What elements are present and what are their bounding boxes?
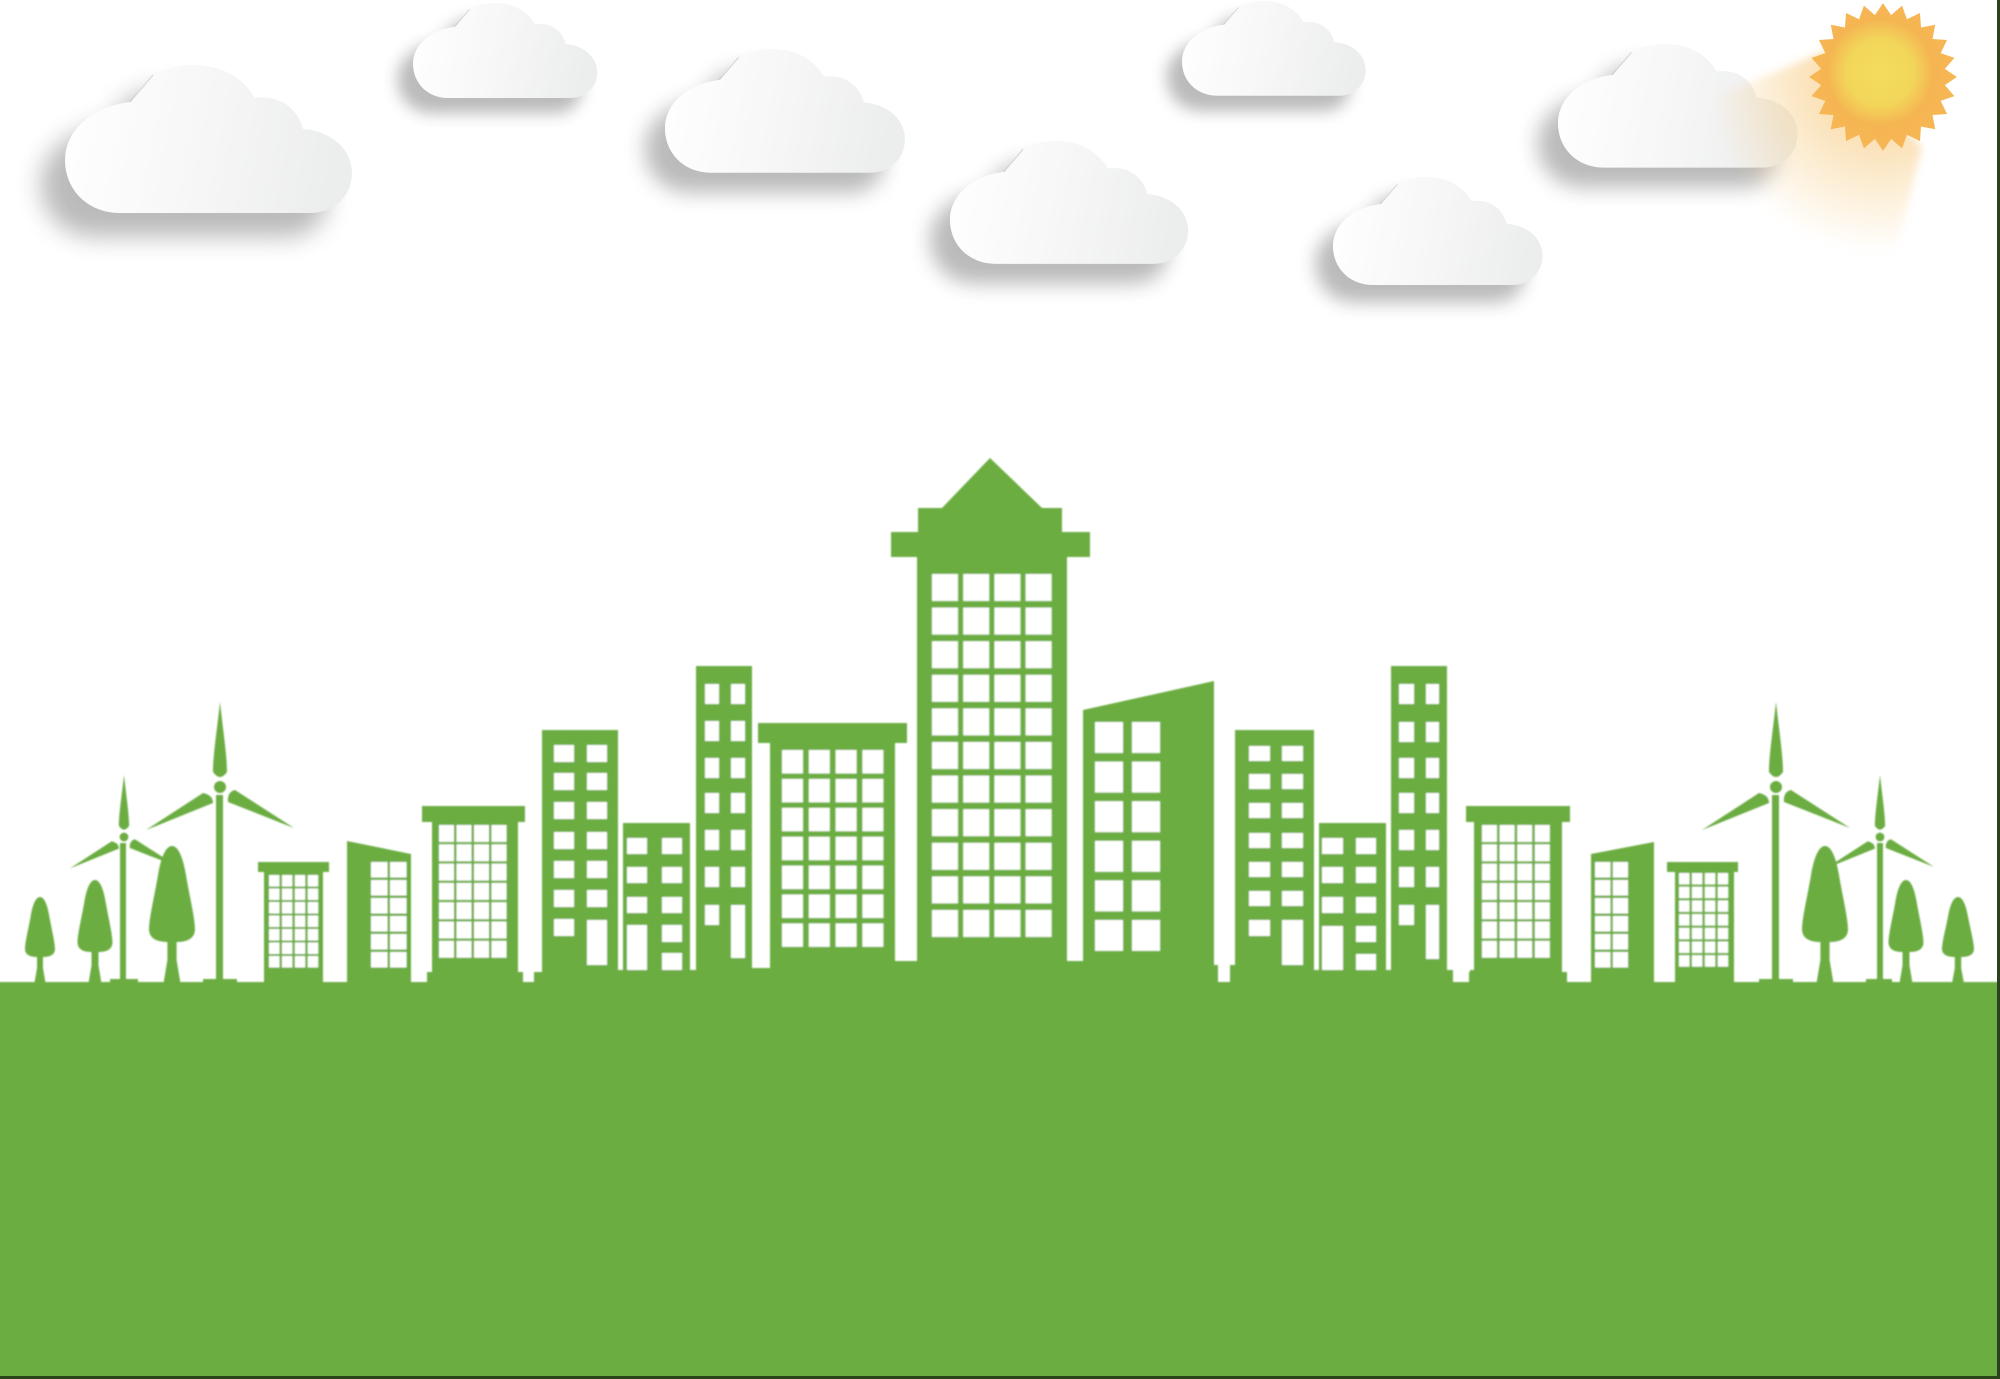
sun glow beam bbox=[1650, 50, 1922, 290]
tree 4 bbox=[1802, 846, 1848, 982]
building J bbox=[1319, 823, 1386, 982]
building bases bbox=[110, 961, 1892, 984]
image border right bbox=[1997, 0, 2000, 1379]
wind turbine large left bbox=[146, 702, 294, 983]
green city skyline bbox=[0, 458, 2000, 1379]
cloud 6 bbox=[1315, 177, 1543, 303]
cloud 5 bbox=[930, 141, 1188, 284]
image border bottom bbox=[0, 1376, 2000, 1379]
cloud 1 bbox=[41, 65, 352, 237]
ground bbox=[0, 982, 2000, 1379]
tree 3 bbox=[149, 846, 195, 982]
building A bbox=[258, 862, 329, 982]
central tower bbox=[891, 458, 1090, 982]
building M bbox=[1591, 842, 1654, 983]
building I bbox=[1235, 730, 1314, 982]
building H bbox=[1083, 681, 1214, 983]
wind turbine large right bbox=[1702, 702, 1850, 983]
cloud 3 bbox=[645, 49, 905, 193]
tree 6 bbox=[1942, 897, 1974, 982]
building C bbox=[422, 806, 525, 983]
building L bbox=[1466, 806, 1570, 983]
icon: sun bbox=[1809, 3, 1957, 151]
cloud 2 bbox=[398, 3, 597, 113]
cloud 7 bbox=[1538, 44, 1798, 188]
cloud 4 bbox=[1167, 1, 1366, 111]
tree 2 bbox=[78, 880, 112, 982]
building N bbox=[1667, 862, 1738, 982]
building B bbox=[347, 841, 411, 983]
tree 1 bbox=[25, 897, 55, 982]
building K bbox=[1391, 666, 1447, 982]
building F bbox=[696, 666, 752, 982]
building G bbox=[758, 723, 907, 982]
wind turbine small right bbox=[1826, 775, 1934, 983]
building E bbox=[623, 823, 690, 982]
building D bbox=[542, 730, 618, 982]
tree 5 bbox=[1888, 880, 1924, 982]
wind turbine small left bbox=[70, 775, 178, 983]
